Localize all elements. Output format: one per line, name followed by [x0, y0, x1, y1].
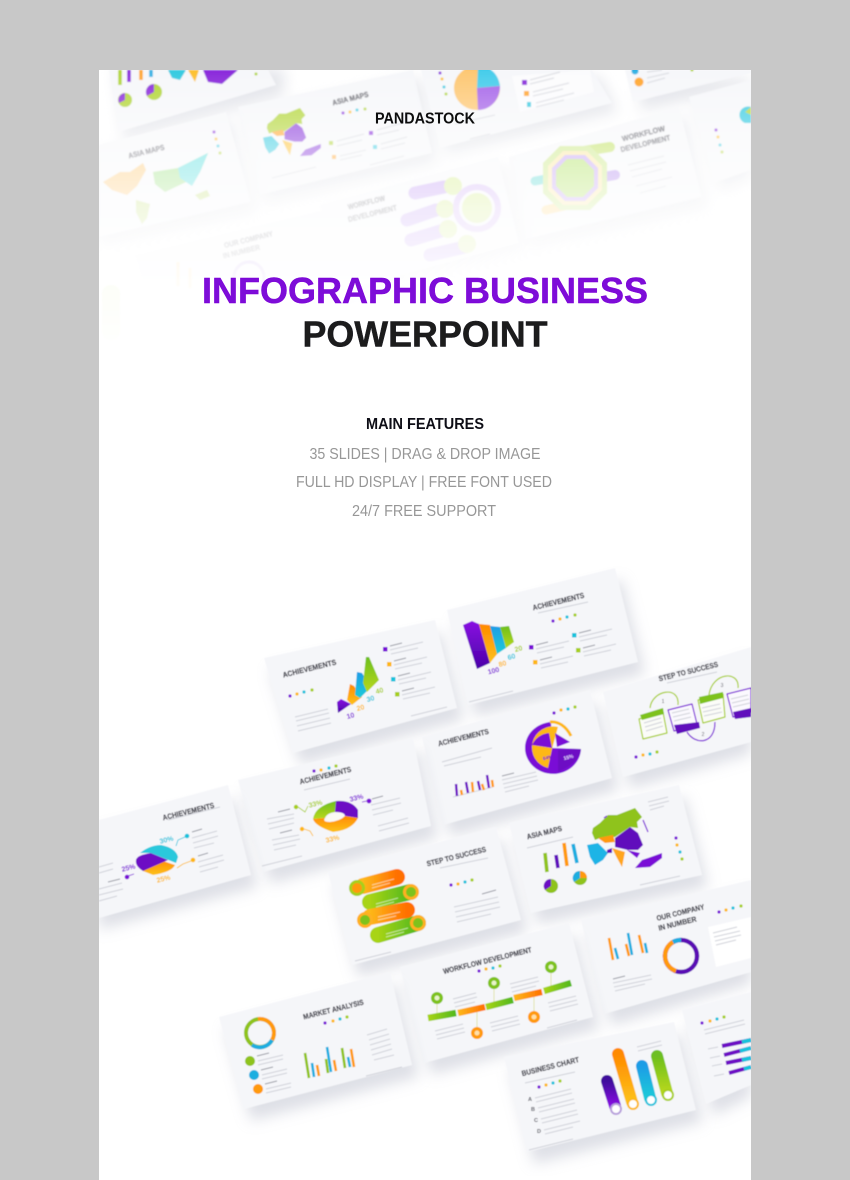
world map — [103, 153, 210, 224]
lettered list: D — [537, 1129, 541, 1135]
title: workflow development: DEVELOPMENT — [347, 203, 398, 224]
bar chart — [609, 933, 647, 960]
funnel chart: 80 — [498, 660, 507, 669]
map of Asia — [587, 808, 662, 868]
title: our company in number — [223, 232, 272, 258]
funnel chart: 20 — [514, 645, 523, 654]
title: Asia maps: ASIA MAPS — [331, 90, 369, 107]
funnel chart: 100 — [487, 667, 500, 676]
slide: Asia maps — [509, 785, 708, 925]
lettered list: B — [531, 1107, 535, 1113]
faded slide: our company — [177, 231, 272, 277]
donut chart — [246, 1019, 274, 1047]
slide title: WORKFLOW DEVELOPMENT — [442, 945, 533, 976]
slide title: ACHIEVEMENTS — [162, 801, 215, 822]
3D pie chart — [121, 834, 195, 885]
mountain chart: 40 — [375, 687, 384, 696]
step diagram: 2 — [702, 732, 705, 738]
title: workflow development — [620, 125, 670, 152]
slide title: ACHIEVEMENTS — [282, 658, 337, 680]
slide title: OUR COMPANY — [656, 902, 705, 923]
slide: market analysis — [219, 972, 419, 1121]
slide: achievements mountains — [264, 620, 464, 765]
3D pie chart: 25% — [121, 863, 137, 874]
exploded pie chart — [525, 722, 581, 774]
pill bar chart — [607, 1054, 673, 1114]
title: workflow development: DEVELOPMENT — [620, 133, 672, 154]
slide title: BUSINESS CHART — [521, 1055, 580, 1078]
faded slide: workflow pills — [347, 176, 501, 261]
slide title: IN NUMBER — [657, 914, 698, 933]
3D pie chart: 30% — [159, 835, 175, 846]
title line 1: INFOGRAPHIC BUSINESS — [202, 270, 648, 311]
mountain chart — [337, 657, 384, 721]
slide title — [656, 902, 705, 933]
lettered list — [528, 1089, 580, 1135]
slide collage at bottom — [99, 568, 751, 1164]
bar chart — [453, 775, 493, 797]
hexagon diagram — [535, 146, 615, 210]
feature line 2: FULL HD DISPLAY | FREE FONT USED — [296, 474, 552, 491]
funnel chart — [463, 621, 523, 676]
slide: bottom right bars — [682, 992, 751, 1116]
title: our company in number: OUR COMPANY — [223, 229, 274, 250]
legend — [529, 629, 616, 668]
features heading: MAIN FEATURES — [366, 416, 484, 433]
step diagram — [639, 676, 751, 741]
slide: achievements funnel — [447, 568, 645, 717]
timeline — [428, 961, 571, 1039]
bar chart — [305, 1047, 354, 1078]
white fade overlay — [99, 70, 751, 360]
exploded pie chart: 15% — [563, 754, 575, 762]
pill diagram — [407, 177, 498, 255]
pie chart — [454, 66, 500, 110]
feature line 1: 35 SLIDES | DRAG & DROP IMAGE — [310, 446, 540, 463]
white page — [99, 70, 751, 1180]
lettered list: C — [534, 1118, 538, 1124]
slide title: STEP TO SUCCESS — [658, 660, 719, 683]
slide: business chart — [504, 1022, 703, 1164]
funnel chart: 60 — [507, 653, 516, 662]
icon list — [245, 1053, 291, 1094]
donut chart — [665, 940, 697, 972]
slide: achievements pie — [422, 690, 619, 837]
slide: step to success cards — [603, 647, 751, 789]
step diagram: 3 — [721, 683, 724, 689]
donut chart: 33% — [325, 834, 341, 845]
faded slide: pie chart — [424, 70, 615, 150]
ribbon diagram — [349, 877, 426, 937]
white info card — [708, 917, 751, 967]
slide: workflow development — [400, 923, 600, 1075]
mountain chart: 20 — [356, 704, 365, 713]
slide: our company in number — [581, 880, 751, 1026]
donut chart: 33% — [349, 793, 365, 804]
slide title: MARKET ANALYSIS — [302, 998, 365, 1021]
mountain chart: 30 — [366, 695, 375, 704]
brand name: PANDASTOCK — [375, 110, 475, 128]
slide title: ACHIEVEMENTS — [532, 591, 585, 612]
title: our company in number: IN NUMBER — [222, 242, 261, 261]
main title — [202, 270, 648, 354]
faded slide: Asia maps — [262, 72, 433, 184]
slide title: ASIA MAPS — [526, 824, 563, 841]
3D pie chart: 25% — [156, 874, 172, 885]
faded slide: charts with pies — [109, 70, 284, 142]
slide title: ACHIEVEMENTS — [437, 727, 490, 748]
pie charts — [544, 871, 587, 893]
slide: achievements donut — [238, 738, 438, 884]
faded slide: right edge — [714, 98, 751, 180]
title: workflow development: WORKFLOW — [347, 193, 387, 212]
slide: achievements pie left — [99, 785, 258, 930]
donut chart — [294, 793, 371, 845]
title: workflow development — [348, 196, 396, 222]
feature list — [296, 416, 552, 520]
title: workflow development: WORKFLOW — [621, 124, 667, 143]
title: Asia maps: ASIA MAPS — [127, 143, 165, 160]
slide title: STEP TO SUCCESS — [426, 845, 487, 868]
slide title: ACHIEVEMENTS — [299, 765, 352, 786]
map of Asia — [263, 108, 321, 156]
horizontal bar chart — [722, 1040, 751, 1073]
lettered list: A — [528, 1097, 532, 1103]
donut chart: 33% — [308, 799, 324, 810]
faded slide: top right — [626, 70, 750, 110]
faded slide: workflow hexagon — [530, 122, 691, 215]
legend — [383, 642, 435, 699]
title line 2: POWERPOINT — [302, 314, 548, 354]
step diagram: 1 — [662, 699, 665, 705]
faded lime shape at left edge — [102, 285, 120, 340]
exploded pie chart: 64% — [542, 754, 554, 762]
faded slide: world map — [103, 125, 236, 224]
faded slide collage at top — [103, 70, 751, 277]
bar chart — [545, 843, 577, 872]
slide: step to success ribbons — [328, 827, 528, 977]
mountain chart: 10 — [346, 712, 355, 721]
feature line 3: 24/7 FREE SUPPORT — [352, 503, 496, 520]
